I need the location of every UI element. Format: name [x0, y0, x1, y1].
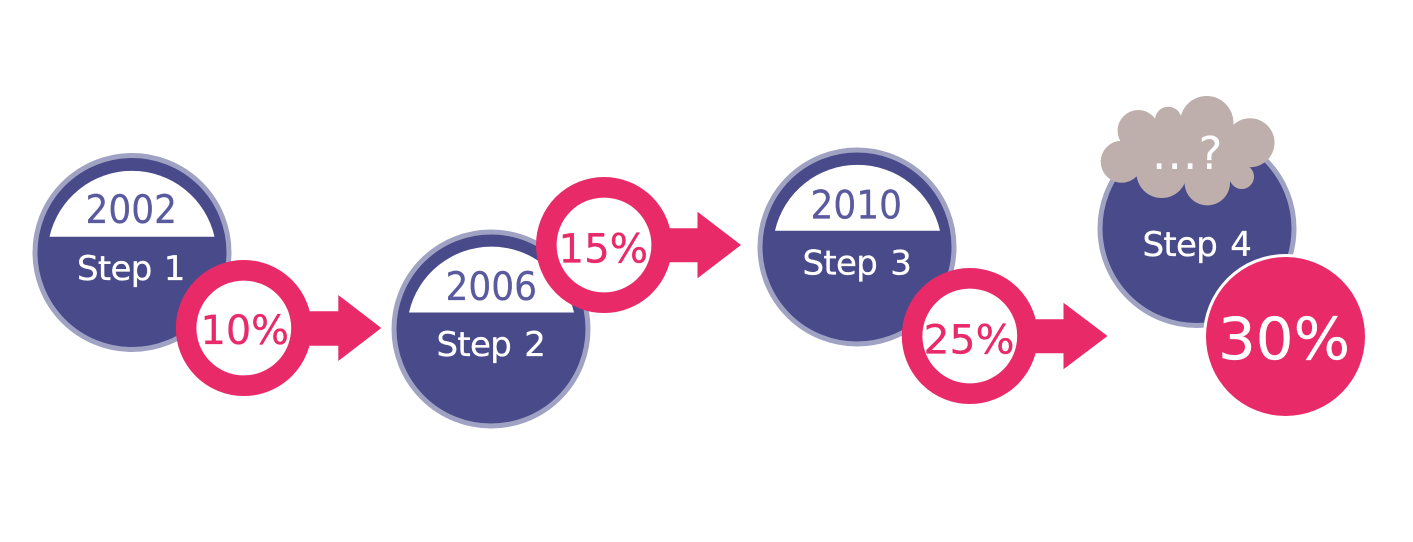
value: 15%: 15% [558, 227, 648, 273]
step label: Step 1: Step 1 [77, 249, 185, 289]
callout: 10% ring with arrow [186, 270, 381, 386]
value: 30%: 30% [1218, 305, 1350, 373]
panel: step 2 circle [394, 232, 588, 426]
year: 2002: 2002 [86, 188, 177, 233]
value: 25%: 25% [924, 317, 1014, 363]
panel: step 1 circle [35, 156, 229, 350]
panel: step 4 circle [1100, 132, 1294, 326]
step label: Step 3: Step 3 [802, 243, 911, 283]
step label: Step 4: Step 4 [1142, 225, 1251, 265]
callout: 25% ring with arrow [912, 278, 1108, 394]
cloud text: ...?: ...? [1152, 127, 1224, 180]
year: 2006: 2006 [446, 265, 537, 310]
callout: 30% result circle [1204, 256, 1366, 418]
panel: step 3 circle [760, 150, 954, 344]
step label: Step 2: Step 2 [436, 325, 545, 365]
value: 10%: 10% [200, 308, 289, 354]
callout: 15% ring with arrow [546, 187, 741, 303]
icon: cloud with question mark [1101, 96, 1274, 205]
year: 2010: 2010 [810, 183, 902, 228]
